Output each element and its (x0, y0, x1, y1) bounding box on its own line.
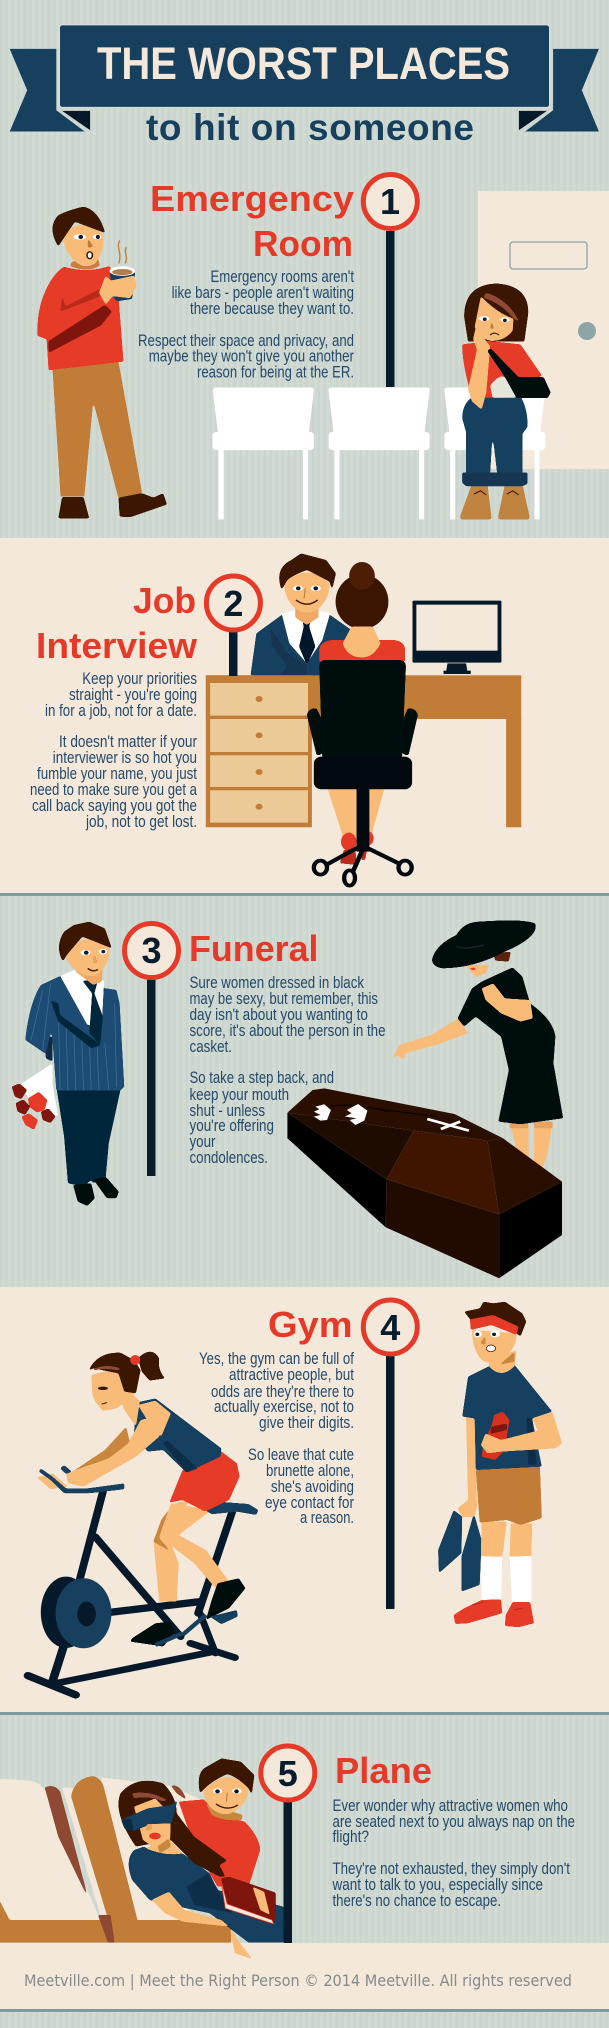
section 1 text: Respect their space and privacy, and (138, 332, 354, 350)
far leg (153, 1500, 190, 1602)
exercise bike and woman (28, 1352, 258, 1695)
section 3 text: day isn't about you wanting to (190, 1006, 368, 1024)
hair bun (493, 952, 511, 962)
woman hair back (118, 1781, 227, 1877)
section 2 heading: Interview (36, 625, 198, 666)
coffee cup (110, 272, 135, 301)
section 5 text: there's no chance to escape. (332, 1892, 501, 1910)
far arm (70, 1427, 130, 1480)
man head (204, 1777, 249, 1814)
title text: THE WORST PLACES (97, 38, 510, 89)
number 2 sign (206, 576, 260, 676)
hand (37, 1473, 68, 1489)
number 5 sign (261, 1746, 315, 1943)
neck (74, 962, 103, 985)
hidden arm (45, 1037, 52, 1062)
section 2 heading (36, 580, 198, 666)
right arm (481, 1412, 562, 1453)
near arm (66, 1415, 161, 1487)
section 2 text: need to make sure you get a (30, 781, 198, 799)
section 2 heading: Job (133, 580, 196, 621)
dress (458, 967, 563, 1124)
bottle (482, 1412, 510, 1460)
chair back (319, 660, 406, 760)
nose (146, 1824, 152, 1831)
flowers on coffin (330, 1105, 437, 1117)
section 2 text: job, not to get lost. (85, 813, 197, 831)
man with coffee (37, 207, 167, 518)
hair (59, 922, 112, 962)
section 4 text: Yes, the gym can be full of (199, 1350, 354, 1368)
section 3 text: you're offering (190, 1117, 274, 1135)
number 1 sign: 1 (380, 181, 400, 222)
section 3 text: condolences. (190, 1149, 268, 1167)
section 2 text: interviewer is so hot you (53, 749, 197, 767)
red shoes (341, 833, 357, 851)
neck (70, 257, 100, 270)
near leg (159, 1503, 229, 1588)
trousers (52, 362, 142, 498)
section 2 text: in for a job, not for a date. (45, 702, 197, 720)
woman arm (151, 1892, 252, 1959)
desk and monitor (206, 601, 521, 827)
hand (99, 276, 137, 305)
head (91, 1368, 138, 1411)
plaster (490, 376, 517, 398)
drawers (210, 683, 308, 823)
woman in office chair (307, 562, 418, 886)
jacket (25, 976, 124, 1091)
section 1 text: maybe they won't give you another (149, 348, 354, 366)
man neck (206, 1803, 243, 1820)
eyes (80, 950, 90, 955)
section 3 text: Sure women dressed in black (190, 974, 365, 992)
section 2 text: Keep your priorities (82, 670, 197, 688)
flywheel (41, 1577, 91, 1648)
hair (52, 207, 105, 247)
section 4 heading: Gym (268, 1304, 353, 1345)
book (221, 1877, 276, 1924)
shoes (454, 1599, 534, 1627)
head (66, 939, 110, 976)
man torso (179, 1799, 260, 1887)
eye mask (121, 1800, 177, 1832)
number 4 sign: 4 (380, 1307, 400, 1348)
bike frame (28, 1492, 235, 1695)
number 3 sign: 3 (141, 930, 162, 971)
hair and bun (336, 574, 388, 629)
woman with sling (460, 283, 551, 519)
section 1 text: like bars - people aren't waiting (172, 284, 354, 302)
shirt (60, 970, 104, 1025)
tie (82, 981, 103, 1045)
chair base (357, 788, 369, 852)
tee (462, 1365, 552, 1470)
section 4 text: give their digits. (259, 1414, 354, 1432)
shoes (58, 493, 167, 518)
man with flowers behind back (12, 922, 124, 1206)
shoes (73, 1177, 119, 1206)
legs (481, 1522, 532, 1557)
door (478, 191, 609, 469)
section 5 text: flight? (332, 1828, 369, 1846)
shoes (130, 1622, 175, 1647)
section 4 text: odds are they're there to (211, 1383, 354, 1401)
office interviewer (251, 553, 352, 675)
section 5 heading: Plane (335, 1750, 432, 1791)
section 1 heading: Room (253, 223, 353, 264)
section 3 text: score, it's about the person in the (190, 1022, 386, 1040)
number 2 sign: 2 (223, 583, 243, 624)
head (472, 1330, 517, 1363)
cross (427, 1119, 469, 1131)
boots (460, 484, 529, 519)
eyes and mouth (473, 1331, 482, 1337)
sweater (37, 266, 124, 370)
towel (438, 1510, 462, 1573)
bouquet wrap (19, 1063, 58, 1117)
man hair (199, 1758, 254, 1795)
tulips (12, 1083, 27, 1099)
neck (489, 1350, 517, 1373)
top (462, 341, 542, 398)
hand on book (252, 1887, 270, 1915)
supporting arm (468, 327, 490, 410)
sling (487, 348, 551, 398)
trousers (56, 1087, 121, 1187)
section 3 text: casket. (190, 1038, 232, 1056)
section 4 text: a reason. (300, 1509, 354, 1527)
section 3 text: keep your mouth (190, 1086, 289, 1104)
section 1 text: there because they want to. (190, 300, 354, 318)
title banner (10, 25, 599, 132)
neck (146, 1837, 183, 1854)
number 4 sign (363, 1300, 417, 1609)
section 2 text: fumble your name, you just (37, 765, 197, 783)
hat (432, 920, 536, 968)
arm (390, 1018, 468, 1064)
section 1 heading (150, 178, 354, 264)
section 4 text (199, 1350, 354, 1527)
section 4 text: actually exercise, not to (214, 1398, 354, 1416)
subtitle: to hit on someone (146, 107, 474, 148)
section 3 text: may be sexy, but remember, this (190, 990, 378, 1008)
section 4 text: eye contact for (265, 1494, 354, 1512)
eyes (73, 234, 86, 240)
hair highlight (484, 293, 520, 322)
section 4 text: brunette alone, (266, 1462, 354, 1480)
top (319, 640, 405, 662)
socks (481, 1556, 531, 1603)
woman in black dress (390, 920, 563, 1170)
lips (149, 1833, 161, 1839)
seat (206, 1502, 258, 1515)
section 2 text: straight - you're going (69, 686, 197, 704)
arm shadow (49, 305, 112, 353)
seat (314, 757, 412, 789)
head (63, 225, 103, 266)
top (134, 1398, 221, 1473)
number 1 sign (363, 174, 417, 387)
headband (470, 1315, 519, 1335)
face (475, 296, 513, 341)
airplane seats (0, 1776, 241, 1949)
pinstripes (31, 983, 117, 1090)
section 4 text: attractive people, but (229, 1366, 354, 1384)
hair (89, 1353, 141, 1393)
handlebar (39, 1465, 124, 1493)
section 1 text (138, 268, 354, 381)
legs (510, 1122, 553, 1170)
armrests (307, 708, 418, 755)
woman face (134, 1798, 171, 1848)
shorts (476, 1465, 542, 1525)
section 4 text: she's avoiding (271, 1478, 354, 1496)
woman dress (129, 1847, 284, 1943)
monitor (412, 601, 501, 663)
section 1 text: Emergency rooms aren't (210, 268, 354, 286)
man with towel and bottle (438, 1302, 562, 1627)
section 1 heading: Emergency (150, 178, 354, 219)
steam (118, 240, 126, 263)
face (465, 965, 489, 977)
man face (213, 1788, 222, 1794)
section 5 text: want to talk to you, especially since (332, 1876, 543, 1894)
hair (464, 1302, 526, 1337)
section 4 text: So leave that cute (248, 1446, 354, 1464)
lapel shadow (50, 1000, 101, 1048)
white waiting room chairs (212, 387, 545, 519)
number 3 sign (124, 924, 178, 1176)
neck (343, 627, 381, 657)
hand on chest (482, 983, 533, 1022)
section 5 text (332, 1797, 575, 1910)
section 2 text (30, 670, 198, 831)
hair (464, 283, 528, 342)
section 1 text: reason for being at the ER. (197, 363, 354, 381)
jeans (462, 393, 528, 474)
section 3 text: your (190, 1133, 216, 1151)
section 2 text: call back saying you got the (32, 797, 197, 815)
section 3 text: shut - unless (190, 1102, 265, 1120)
hair highlight (132, 1792, 167, 1802)
shorts (169, 1450, 240, 1512)
desk (206, 675, 521, 719)
couple on plane (118, 1758, 284, 1959)
section 3 heading: Funeral (189, 928, 318, 969)
torso skin and neck (117, 1390, 140, 1427)
left arm (458, 1417, 477, 1517)
number 5 sign: 5 (278, 1753, 298, 1794)
section 3 text (190, 974, 386, 1167)
section 2 text: It doesn't matter if your (59, 733, 197, 751)
suit (251, 610, 352, 675)
coffin (287, 1088, 562, 1278)
legs (327, 788, 385, 847)
section 3 text: So take a step back, and (190, 1069, 334, 1087)
